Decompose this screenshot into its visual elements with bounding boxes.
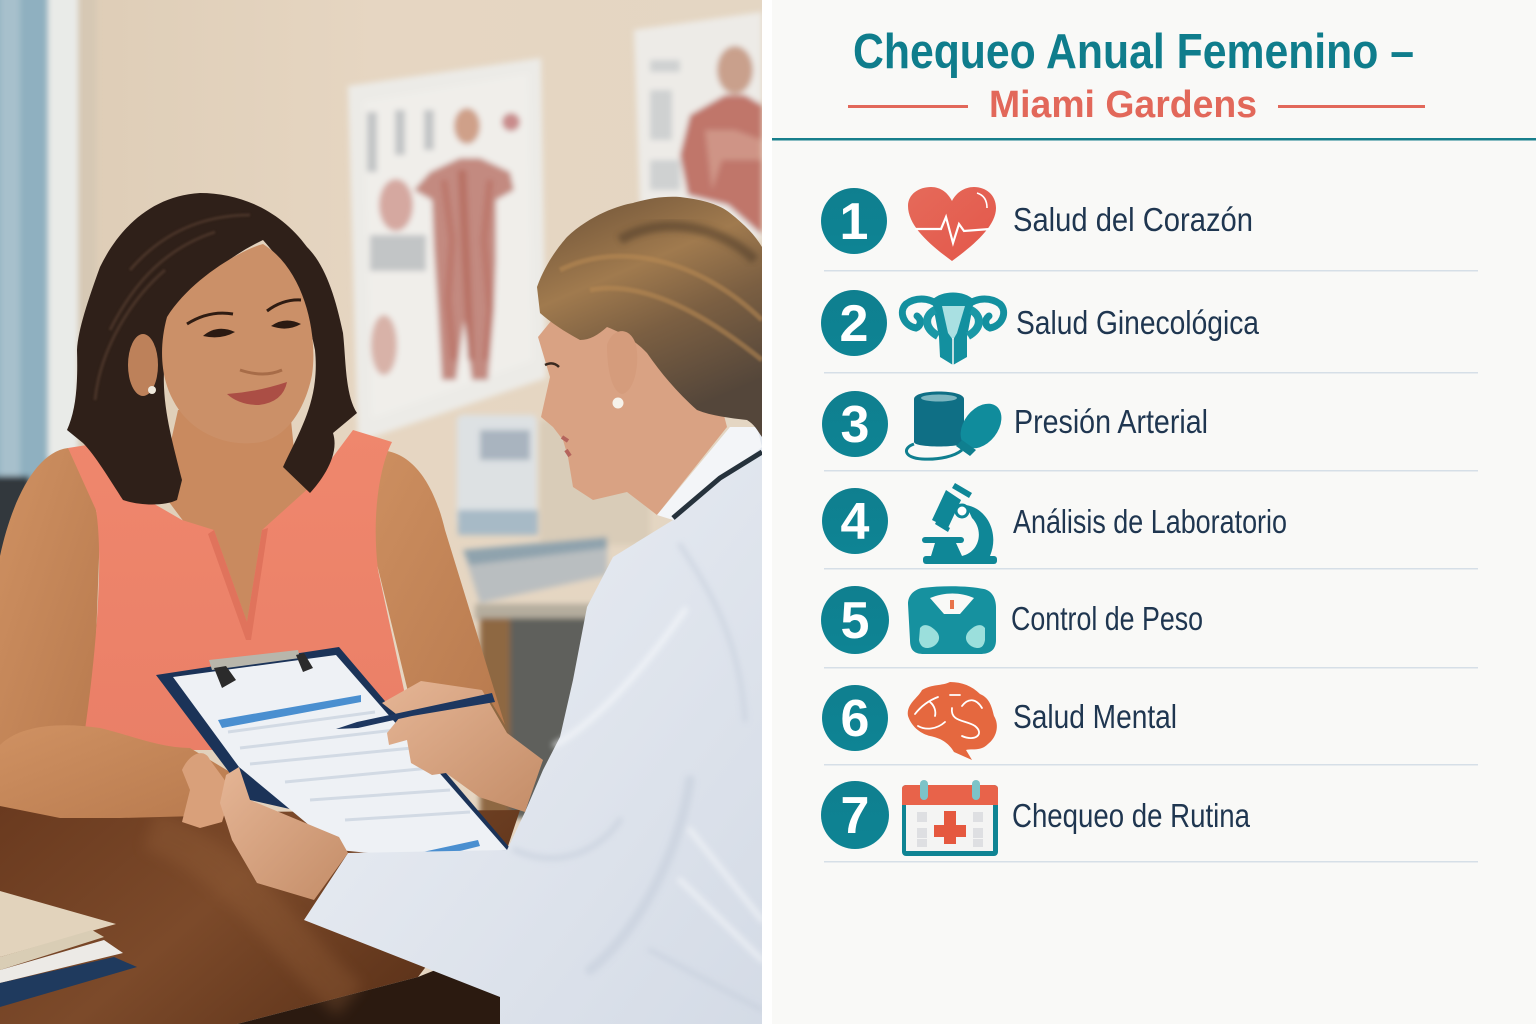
white gutter bbox=[762, 0, 772, 1024]
patient upper arms bbox=[0, 448, 100, 760]
patient bbox=[0, 193, 505, 828]
doctor neck and face bbox=[538, 310, 727, 515]
item 2: Salud Ginecológica bbox=[821, 290, 1260, 365]
doctor collar and stethoscope bbox=[657, 427, 762, 520]
panel: checklist background bbox=[772, 0, 1536, 1024]
label: Salud Ginecológica bbox=[1016, 304, 1260, 341]
patient forearm bbox=[0, 725, 235, 818]
doctor upper hand bbox=[382, 681, 543, 812]
form header bars bbox=[218, 695, 480, 861]
subtitle: Miami Gardens: Miami Gardens bbox=[989, 84, 1257, 126]
number 5 bbox=[821, 586, 889, 654]
clinic wall background bbox=[0, 0, 762, 1024]
title: Chequeo Anual Femenino – bbox=[853, 25, 1414, 79]
item 5: Control de Peso bbox=[821, 586, 1203, 654]
patient ear and earring bbox=[128, 334, 158, 396]
doctor lower hand bbox=[220, 767, 348, 900]
pen bbox=[336, 693, 495, 729]
icon: weight scale bbox=[908, 586, 996, 654]
number 4: 4 bbox=[841, 493, 870, 551]
panel: photo of doctor and patient bbox=[0, 0, 762, 1024]
clip bbox=[209, 650, 313, 688]
label: Presión Arterial bbox=[1014, 403, 1208, 440]
item 7: Chequeo de Rutina bbox=[821, 780, 1251, 856]
icon: blood pressure cuff bbox=[906, 392, 1010, 459]
number 2 bbox=[821, 290, 887, 356]
item 6: Salud Mental bbox=[822, 682, 1177, 760]
number 7: 7 bbox=[841, 787, 869, 845]
doctor bbox=[220, 197, 762, 1024]
clipboard with form bbox=[156, 647, 509, 861]
subtitle rule left bbox=[848, 105, 968, 108]
doctor mouth and eye bbox=[545, 363, 570, 456]
coat folds bbox=[515, 545, 762, 1010]
doctor ear and earring bbox=[607, 331, 637, 408]
label: Salud Mental bbox=[1013, 698, 1177, 735]
patient hands bbox=[182, 753, 232, 828]
patient face bbox=[162, 244, 313, 443]
number 6 bbox=[822, 685, 888, 751]
label: Análisis de Laboratorio bbox=[1013, 503, 1287, 540]
icon: heart with pulse bbox=[908, 187, 996, 261]
patient eyes, brows, nose, mouth bbox=[187, 300, 301, 405]
medical equipment on counter bbox=[457, 415, 650, 818]
label: Salud del Corazón bbox=[1013, 201, 1253, 238]
table bbox=[0, 806, 520, 1024]
number 2: 2 bbox=[840, 295, 868, 353]
label: Control de Peso bbox=[1011, 600, 1203, 637]
icon: microscope bbox=[922, 483, 997, 564]
number 1: 1 bbox=[840, 193, 868, 251]
icon: brain bbox=[908, 682, 997, 760]
label: Chequeo de Rutina bbox=[1012, 797, 1251, 834]
window and curtain bbox=[0, 0, 96, 566]
doctor hair bbox=[537, 197, 762, 437]
row dividers bbox=[824, 270, 1478, 862]
item 4: Análisis de Laboratorio bbox=[822, 483, 1287, 564]
subtitle rule right bbox=[1278, 105, 1425, 108]
number 6: 6 bbox=[841, 690, 869, 748]
number 4 bbox=[822, 488, 888, 554]
patient hair bbox=[67, 193, 357, 504]
doctor white coat bbox=[304, 427, 762, 1024]
patient blouse bbox=[68, 430, 404, 750]
icon: calendar with cross bbox=[902, 780, 998, 856]
item 1: Salud del Corazón bbox=[821, 187, 1253, 261]
anatomy poster right bbox=[634, 12, 762, 240]
number 7 bbox=[821, 781, 889, 849]
folders on table bbox=[0, 891, 137, 1007]
number 3 bbox=[822, 391, 888, 457]
patient neck and chest bbox=[160, 410, 318, 640]
number 1 bbox=[821, 188, 887, 254]
number 3: 3 bbox=[841, 396, 869, 454]
number 5: 5 bbox=[841, 592, 869, 650]
anatomy poster left bbox=[348, 58, 546, 442]
item 3: Presión Arterial bbox=[822, 391, 1208, 459]
icon: uterus bbox=[902, 292, 1004, 365]
